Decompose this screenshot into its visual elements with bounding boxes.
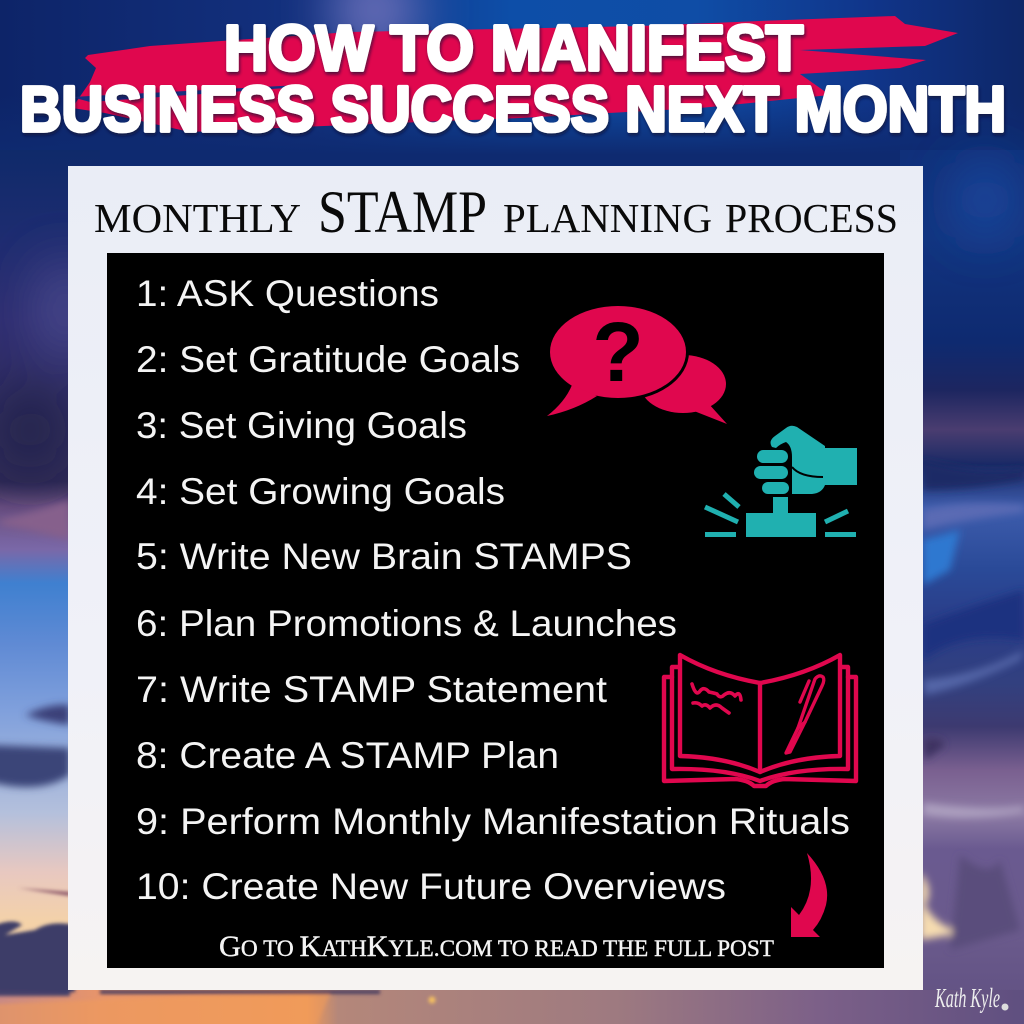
numbered list: 2: Set Gratitude Goals — [136, 339, 520, 380]
icon: open book with pen — [664, 655, 856, 786]
numbered list: 3: Set Giving Goals — [136, 405, 467, 446]
heading: monthly STAMP planning process — [94, 179, 898, 245]
icon: speech bubbles with question mark — [547, 303, 727, 424]
title — [20, 12, 1006, 145]
icon: speech bubbles with question mark: ? — [592, 305, 644, 399]
title: HOW TO MANIFEST — [224, 12, 803, 84]
numbered list — [136, 273, 850, 907]
numbered list: 7: Write STAMP Statement — [136, 669, 608, 710]
heading: monthly STAMP planning process: MONTHLY — [94, 195, 301, 241]
panel: black list panel — [107, 253, 884, 968]
heading: monthly STAMP planning process: PROCESS — [725, 195, 898, 241]
numbered list: 5: Write New Brain STAMPS — [136, 536, 632, 577]
numbered list: 1: ASK Questions — [136, 273, 439, 314]
arrow: curved pointing down-left — [791, 853, 827, 937]
numbered list: 10: Create New Future Overviews — [136, 866, 726, 907]
heading: monthly STAMP planning process: PLANNING — [503, 195, 712, 241]
numbered list: 6: Plan Promotions & Launches — [136, 603, 677, 644]
brush stroke behind title — [72, 16, 958, 132]
numbered list: 9: Perform Monthly Manifestation Rituals — [136, 801, 850, 842]
heading: monthly STAMP planning process: STAMP — [318, 179, 487, 245]
footer call to action: GO TO KATHKYLE.COM TO READ THE FULL POST — [219, 930, 774, 963]
numbered list: 8: Create A STAMP Plan — [136, 735, 559, 776]
numbered list: 4: Set Growing Goals — [136, 471, 505, 512]
panel: white frame — [68, 166, 923, 990]
icon: fist with stamp — [705, 426, 857, 537]
